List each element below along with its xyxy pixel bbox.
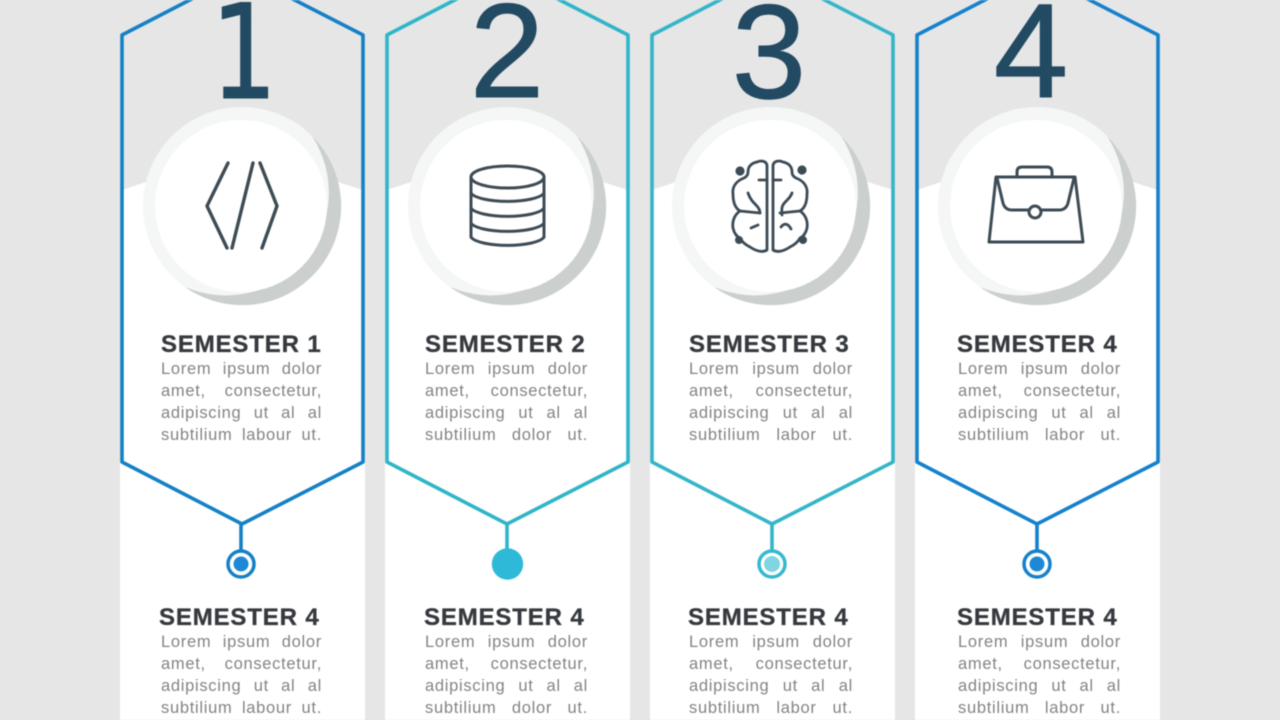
text block: semester 3: Lorem ipsum dolor (689, 360, 853, 378)
icon circle (143, 107, 341, 305)
panel: semester 4 (914, 0, 1161, 720)
text block: semester 4: adipiscing ut al al (958, 404, 1121, 422)
text block: lower semester 1 column: subtilium labour ut. (161, 699, 322, 717)
text block: semester 1: Lorem ipsum dolor (161, 360, 322, 378)
text block: lower semester 3 column: Lorem ipsum dolor (689, 633, 853, 651)
hexagon outline (917, 0, 1158, 524)
text block: lower semester 2 column: adipiscing ut al al (425, 677, 588, 695)
text block: semester 3: adipiscing ut al al (689, 404, 853, 422)
panel: semester 2 (384, 0, 631, 720)
text block: semester 2: subtilium dolor ut. (425, 426, 588, 444)
heading: semester 3: SEMESTER 3 (689, 331, 850, 358)
text block: lower semester 3 column: subtilium labor ut. (689, 699, 853, 717)
text block: lower semester 4 column: Lorem ipsum dolor (958, 633, 1121, 651)
text block: lower semester 3 column: adipiscing ut al al (689, 677, 853, 695)
text block: lower semester 2 column: subtilium dolor ut. (425, 699, 588, 717)
icon: brain (733, 161, 807, 251)
timeline node (228, 524, 254, 577)
text block: semester 3: subtilium labor ut. (689, 426, 853, 444)
text block: lower semester 3 column: amet, consectetur, (689, 655, 853, 673)
heading: semester 1: SEMESTER 1 (161, 331, 322, 358)
text block: lower semester 4 column: subtilium labor ut. (958, 699, 1121, 717)
panel background (915, 182, 1161, 720)
icon circle (408, 107, 606, 305)
text block: lower semester 1 column (161, 633, 322, 717)
text block: semester 1 (161, 360, 322, 444)
text block: lower semester 4 column: adipiscing ut al al (958, 677, 1121, 695)
timeline node (1024, 524, 1050, 577)
hexagon outline (652, 0, 893, 524)
text block: lower semester 1 column: Lorem ipsum dolor (161, 633, 322, 651)
text block: lower semester 2 column: amet, consectetur, (425, 655, 588, 673)
text block: semester 2: amet, consectetur, (425, 382, 588, 400)
icon: code brackets (207, 163, 277, 248)
text block: semester 4 (958, 360, 1121, 444)
text block: lower semester 1 column: amet, consectetur, (161, 655, 322, 673)
panel background (120, 182, 365, 720)
panel: semester 3 (649, 0, 896, 720)
heading: lower semester 4 column: SEMESTER 4 (957, 604, 1118, 631)
panel background (650, 182, 895, 720)
heading: semester 4: SEMESTER 4 (957, 331, 1118, 358)
text block: semester 2: adipiscing ut al al (425, 404, 588, 422)
text block: lower semester 4 column: amet, consectetur, (958, 655, 1121, 673)
heading: semester 2: SEMESTER 2 (425, 331, 586, 358)
heading: lower semester 1 column: SEMESTER 4 (159, 604, 320, 631)
text block: semester 2: Lorem ipsum dolor (425, 360, 588, 378)
icon: database (471, 166, 544, 245)
text block: semester 4: subtilium labor ut. (958, 426, 1121, 444)
icon circle (672, 107, 870, 305)
text block: lower semester 4 column (958, 633, 1121, 717)
hexagon outline (122, 0, 363, 524)
panel: semester 1 (119, 0, 366, 720)
text block: semester 4: amet, consectetur, (958, 382, 1121, 400)
text block: semester 1: adipiscing ut al al (161, 404, 322, 422)
timeline node (759, 524, 785, 577)
text block: semester 2 (425, 360, 588, 444)
timeline node (492, 524, 523, 580)
text block: lower semester 3 column (689, 633, 853, 717)
text block: lower semester 2 column: Lorem ipsum dolor (425, 633, 588, 651)
heading: lower semester 2 column: SEMESTER 4 (424, 604, 585, 631)
panel background (385, 182, 630, 720)
icon: briefcase (989, 167, 1083, 242)
text block: semester 1: amet, consectetur, (161, 382, 322, 400)
text block: semester 1: subtilium labour ut. (161, 426, 322, 444)
text block: lower semester 2 column (425, 633, 588, 717)
hexagon outline (387, 0, 628, 524)
heading: lower semester 3 column: SEMESTER 4 (688, 604, 849, 631)
text block: semester 4: Lorem ipsum dolor (958, 360, 1121, 378)
icon circle (938, 107, 1136, 305)
text block: semester 3: amet, consectetur, (689, 382, 853, 400)
text block: semester 3 (689, 360, 853, 444)
text block: lower semester 1 column: adipiscing ut al al (161, 677, 322, 695)
